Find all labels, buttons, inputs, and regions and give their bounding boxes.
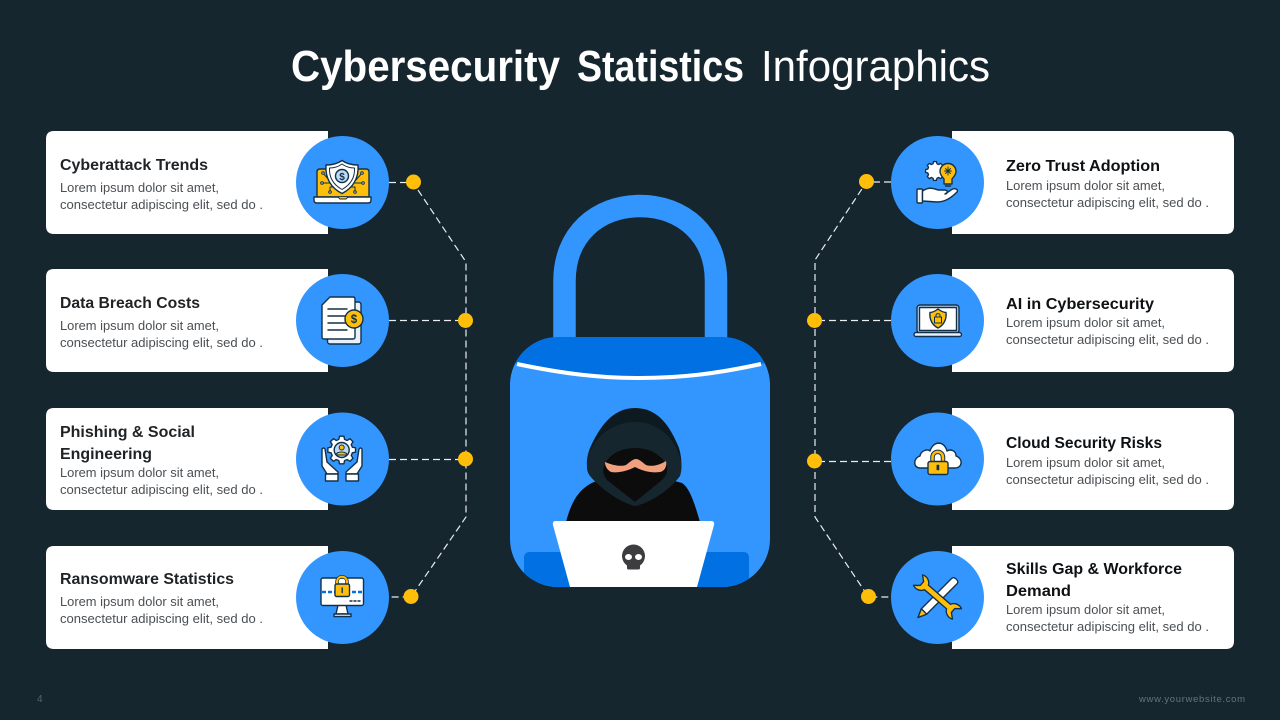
- panel: Cloud Security Risks: consectetur adipiscing elit, sed do .: [1006, 472, 1209, 487]
- hacker: [566, 408, 700, 522]
- dollar mark: $: [339, 172, 345, 183]
- panel: Skills Gap & Workforce Demand: Demand: [1006, 583, 1071, 600]
- desk: [524, 552, 749, 590]
- lock body: [510, 337, 770, 587]
- laptop: [553, 521, 714, 587]
- panel: Zero Trust Adoption: Zero Trust Adoption: [1006, 158, 1160, 175]
- icon: hand with gear and bulb: [917, 162, 958, 203]
- panel: Skills Gap & Workforce Demand: consectetur adipiscing elit, sed do .: [1006, 619, 1209, 634]
- icon: monitor with padlock: [321, 577, 364, 616]
- panel: Skills Gap & Workforce Demand: Lorem ipsum dolor sit amet,: [1006, 602, 1165, 617]
- panel: Cloud Security Risks: [891, 408, 1234, 510]
- panel: Phishing & Social Engineering: consectetur adipiscing elit, sed do .: [60, 482, 263, 497]
- panel: Ransomware Statistics: Ransomware Statistics: [60, 571, 234, 588]
- page number: 4: [37, 694, 43, 705]
- panel: Phishing & Social Engineering: [46, 408, 389, 510]
- icon: laptop with shield: [314, 160, 371, 203]
- title: [291, 42, 990, 91]
- panel: Data Breach Costs: consectetur adipiscing elit, sed do .: [60, 335, 263, 350]
- panel: Cloud Security Risks: Lorem ipsum dolor sit amet,: [1006, 455, 1165, 470]
- skull icon: [622, 544, 645, 570]
- icon: wrench and pencil: [913, 574, 962, 620]
- panel: Ransomware Statistics: [46, 546, 389, 649]
- panel: AI in Cybersecurity: consectetur adipiscing elit, sed do .: [1006, 332, 1209, 347]
- icon: hands with gear: [322, 436, 362, 481]
- panel: Cyberattack Trends: Cyberattack Trends: [60, 157, 208, 174]
- panel: Cloud Security Risks: Cloud Security Risks: [1006, 435, 1162, 452]
- connector dots: [404, 174, 876, 604]
- icon: laptop with shield lock: [914, 305, 962, 336]
- panel: Cyberattack Trends: consectetur adipiscing elit, sed do .: [60, 197, 263, 212]
- title: Statistics: [577, 42, 744, 91]
- panel: Zero Trust Adoption: Lorem ipsum dolor sit amet,: [1006, 178, 1165, 193]
- panel: Ransomware Statistics: Lorem ipsum dolor sit amet,: [60, 594, 219, 609]
- panel: Skills Gap & Workforce Demand: Skills Gap & Workforce: [1006, 561, 1182, 578]
- panel: Data Breach Costs: Lorem ipsum dolor sit amet,: [60, 318, 219, 333]
- panel: Zero Trust Adoption: [891, 131, 1234, 234]
- panel: AI in Cybersecurity: AI in Cybersecurity: [1006, 296, 1154, 313]
- right connector lines: [814, 182, 891, 597]
- dollar mark: $: [351, 314, 358, 326]
- panel: AI in Cybersecurity: Lorem ipsum dolor sit amet,: [1006, 315, 1165, 330]
- panel: Zero Trust Adoption: consectetur adipiscing elit, sed do .: [1006, 195, 1209, 210]
- panel: AI in Cybersecurity: [891, 269, 1234, 372]
- lock top band: [515, 337, 765, 376]
- title: Infographics: [761, 42, 990, 91]
- panel: Skills Gap & Workforce Demand: [891, 546, 1234, 649]
- icon: cloud with padlock: [915, 443, 961, 474]
- panel: Ransomware Statistics: consectetur adipiscing elit, sed do .: [60, 611, 263, 626]
- panel: Phishing & Social Engineering: Engineering: [60, 446, 152, 463]
- panel: Phishing & Social Engineering: Lorem ipsum dolor sit amet,: [60, 465, 219, 480]
- title: Cybersecurity: [291, 42, 560, 91]
- website footer: www.yourwebsite.com: [1138, 694, 1245, 705]
- panel: Cyberattack Trends: Lorem ipsum dolor sit amet,: [60, 180, 219, 195]
- panel: Data Breach Costs: Data Breach Costs: [60, 295, 200, 312]
- left connector lines: [389, 182, 466, 597]
- panel: Data Breach Costs: [46, 269, 389, 372]
- lock shackle: [564, 206, 716, 340]
- panel: Phishing & Social Engineering: Phishing & Social: [60, 424, 195, 441]
- panel: Cyberattack Trends: [46, 131, 389, 234]
- icon: documents with coin: [322, 297, 363, 344]
- padlock illustration: [505, 206, 775, 590]
- white highlight curve: [517, 364, 761, 378]
